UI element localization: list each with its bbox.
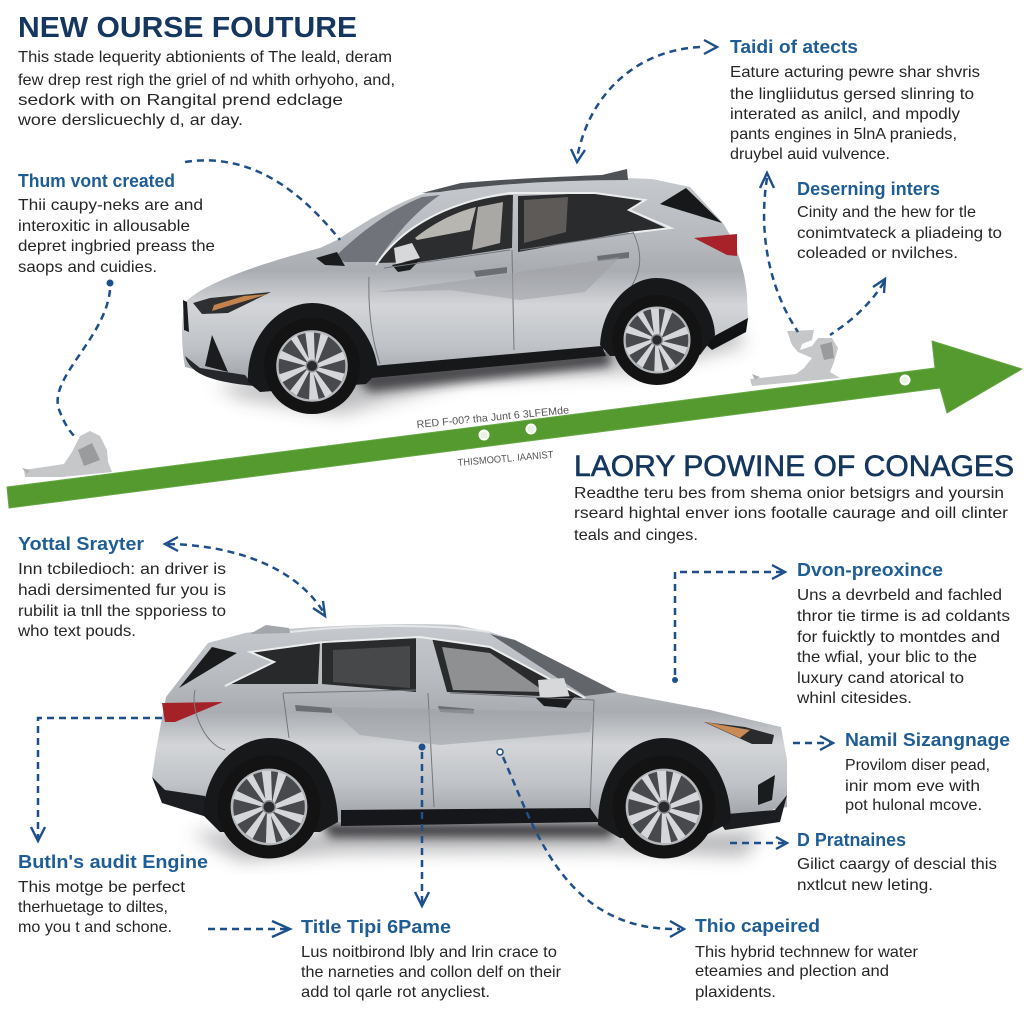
- dashed arrow: left figurine: [58, 280, 114, 439]
- rear lower trim: [703, 318, 748, 350]
- side mirror: [394, 243, 420, 264]
- body crease shading: [376, 257, 620, 300]
- callout: Thio capeired: [695, 916, 919, 1001]
- rear side window: [518, 193, 668, 252]
- callout: Dvon-preoxince: thror tie tirme is ad coldants: [797, 608, 1010, 625]
- intro text block: [17, 49, 395, 129]
- callout: Title Tipi 6Pame: add tol qarle rot anycliest.: [301, 984, 490, 1001]
- figurine icon right: [750, 330, 840, 386]
- front side window: [378, 195, 513, 263]
- callout: Dvon-preoxince: whinl citesides.: [796, 690, 912, 707]
- callout: Thum vont created: [18, 171, 215, 276]
- windshield: [335, 195, 440, 262]
- callout: Dvon-preoxince: the wfial, your blic to the: [797, 649, 977, 666]
- callout: Taidi of atects: [730, 37, 980, 163]
- callout: Butln's audit Engine: [18, 852, 208, 936]
- callout: Butln's audit Engine: Butln's audit Engine: [18, 852, 208, 872]
- callout: Dvon-preoxince: [796, 560, 1010, 707]
- dotted arrow: door to Title Tipi 6Pame: [415, 744, 429, 906]
- main title: NEW OURSE FOUTURE: [18, 12, 357, 44]
- callout: Taidi of atects: interated as anilcl, and mpodly: [730, 106, 960, 123]
- rear window glass highlight: [524, 197, 568, 243]
- mirror base: [392, 259, 421, 272]
- window chrome trim: [225, 637, 585, 698]
- bumper lower trim: [185, 356, 254, 386]
- section intro text: rseard hightal enver ions footalle caurage and oill clinter: [574, 505, 1009, 522]
- section intro text: [574, 485, 1009, 544]
- dashed arrow: Butln's audit Engine: [31, 718, 162, 841]
- rear wheel arch: [600, 278, 715, 356]
- callout: Yottal Srayter: hadi dersimented fur you is: [18, 582, 226, 599]
- callout: Yottal Srayter: [17, 534, 226, 640]
- callout: Namil Sizangnage: Namil Sizangnage: [845, 730, 1010, 750]
- amber headlight strip: [212, 294, 268, 311]
- front window glass: [415, 207, 476, 240]
- dashed arrow: Namil Sizangnage: [793, 736, 833, 750]
- callout: Title Tipi 6Pame: Lus noitbirond lbly and lrin crace to: [301, 944, 557, 961]
- rear wheel: [612, 295, 702, 385]
- dashed arrow: Deserning inters: [830, 279, 885, 335]
- front grille: [758, 775, 775, 805]
- hood vent shadow: [316, 252, 345, 266]
- rear hatch glass: [179, 647, 237, 688]
- figurine icon left: [22, 431, 112, 477]
- callout: Thum vont created: Thum vont created: [18, 171, 175, 191]
- callout: Taidi of atects: pants engines in 5lnA pranieds,: [730, 126, 957, 143]
- dashed arrow: Dvon-preoxince: [672, 565, 785, 683]
- callout: Thum vont created: interoxitic in allousable: [18, 218, 190, 235]
- front wheel arch: [248, 303, 378, 392]
- callout: D Pratnaines: [797, 830, 997, 894]
- rear wheel: [218, 756, 320, 858]
- tail light: [694, 234, 737, 256]
- dashed arrow: Title Tipi 6Pame: [208, 921, 290, 937]
- callout: Butln's audit Engine: therhuetage to diltes,: [18, 899, 168, 916]
- callout: Title Tipi 6Pame: the narneties and collon delf on their: [301, 964, 562, 981]
- sill trim: [341, 808, 600, 826]
- callout: Thio capeired: plaxidents.: [695, 984, 776, 1001]
- dashed arrow: D Pratnaines: [730, 837, 787, 849]
- callout: Yottal Srayter: who text pouds.: [17, 623, 136, 640]
- dotted arrow: door to Thio capeired: [497, 749, 684, 937]
- callout: Yottal Srayter: rubilit ia tnll the spporiess to: [18, 603, 226, 620]
- callout: Dvon-preoxince: Uns a devrbeld and fachled: [797, 587, 1002, 604]
- front lower trim: [715, 795, 787, 830]
- timeline label above: RED F-00? tha Junt 6 3LFEMde: [416, 404, 570, 431]
- front door glass: [442, 647, 545, 692]
- front wheel: [612, 756, 716, 858]
- bottom car ground shadow: [190, 822, 760, 860]
- intro text block: few drep rest righ the griel of nd whith orhyoho, and,: [18, 72, 395, 89]
- callout: Taidi of atects: Taidi of atects: [730, 37, 858, 57]
- callout: Butln's audit Engine: This motge be perfect: [18, 879, 186, 896]
- roof strip and shark fin: [422, 169, 628, 193]
- callout: Namil Sizangnage: inir mom eve with: [845, 778, 980, 795]
- tail light: [162, 702, 223, 722]
- intro text block: wore derslicuechly d, ar day.: [17, 112, 243, 129]
- mirror base: [536, 696, 575, 708]
- callout: Dvon-preoxince: for fuicktly to montdes and: [797, 629, 1000, 646]
- top car: silver SUV facing left: [182, 169, 748, 414]
- callout: Dvon-preoxince: luxury cand atorical to: [797, 670, 964, 687]
- callout: D Pratnaines: Gilict caargy of descial this: [797, 856, 997, 873]
- top car ground shadow: [215, 325, 745, 414]
- side mirror: [538, 678, 570, 700]
- callout: Namil Sizangnage: Provilom diser pead,: [845, 757, 990, 774]
- front wheel arch: [598, 738, 731, 838]
- dashed arrow: to Taidi of atects: [571, 40, 717, 162]
- section intro text: teals and cinges.: [574, 527, 698, 544]
- dashed arrow: to car hood: [185, 160, 340, 240]
- window chrome trim: [376, 193, 671, 265]
- shark fin: [250, 625, 290, 634]
- callout: Namil Sizangnage: [845, 730, 1010, 814]
- front grille and lower intake: [183, 300, 228, 372]
- front seat: [472, 202, 503, 250]
- callout: Thio capeired: This hybrid technnew for water: [695, 944, 919, 961]
- callout: D Pratnaines: D Pratnaines: [797, 830, 906, 850]
- rear door glass highlight: [333, 646, 410, 688]
- callout: Title Tipi 6Pame: Title Tipi 6Pame: [301, 917, 451, 937]
- rear hatch glass: [660, 188, 722, 223]
- rear wheel arch: [203, 738, 338, 832]
- callout: Deserning inters: Deserning inters: [797, 179, 940, 199]
- section intro text: Readthe teru bes from shema onior betsigrs and yoursin: [574, 485, 1004, 502]
- car body: [152, 624, 787, 820]
- section heading: LAORY POWINE OF CONAGES: [574, 450, 1014, 483]
- timeline milestone markers: [480, 376, 910, 440]
- door panel lines: [194, 690, 594, 810]
- door handles: [474, 252, 629, 277]
- green timeline arrow: [7, 341, 1022, 508]
- door panel lines: [369, 232, 640, 364]
- callout: Thum vont created: saops and cuidies.: [18, 259, 157, 276]
- callout: Dvon-preoxince: Dvon-preoxince: [797, 560, 943, 580]
- callout: Deserning inters: [797, 179, 1002, 262]
- roof trim highlight: [290, 626, 490, 632]
- callout: Yottal Srayter: Yottal Srayter: [18, 534, 144, 554]
- callout: Deserning inters: conimtvateck a pliadeing to: [797, 225, 1002, 242]
- rear lower trim: [152, 777, 210, 818]
- rear quarter window: [228, 642, 320, 684]
- timeline label below: THISMOOTL. IAANIST: [457, 450, 554, 469]
- bottom car: silver SUV facing right: [152, 624, 787, 858]
- headlight: [704, 722, 774, 744]
- callout: Taidi of atects: druybel auid vulvence.: [730, 146, 890, 163]
- windshield: [490, 634, 617, 696]
- front wheel: [264, 318, 360, 414]
- dashed arrow: Yottal Srayter: [165, 537, 325, 616]
- callout: Thum vont created: Thii caupy-neks are and: [18, 197, 203, 214]
- callout: Butln's audit Engine: mo you t and schone.: [18, 919, 172, 936]
- sill trim: [372, 346, 606, 378]
- callout: Taidi of atects: Eature acturing pewre shar shvris: [730, 64, 980, 81]
- callout: Thum vont created: depret ingbried preass the: [18, 238, 215, 255]
- amber headlight strip: [705, 722, 750, 738]
- callout: Namil Sizangnage: pot hulonal mcove.: [845, 797, 982, 814]
- callout: Deserning inters: Cinity and the hew for tle: [797, 204, 976, 221]
- callout: Deserning inters: coleaded or nvilches.: [797, 245, 958, 262]
- intro text block: sedork with on Rangital prend edclage: [18, 92, 343, 109]
- rear door window: [322, 638, 416, 692]
- callout: Taidi of atects: the lingliidutus gersed slinring to: [730, 86, 974, 103]
- door handles: [295, 705, 474, 714]
- front door window: [432, 638, 585, 698]
- intro text block: This stade lequerity abtionients of The leald, deram: [18, 49, 392, 66]
- callout: Title Tipi 6Pame: [301, 917, 562, 1001]
- callout: D Pratnaines: nxtlcut new leting.: [797, 877, 933, 894]
- callout: Yottal Srayter: Inn tcbiledioch: an driver is: [18, 561, 226, 578]
- body crease shading: [328, 707, 594, 745]
- car body: [182, 178, 748, 384]
- callout: Thio capeired: Thio capeired: [695, 916, 820, 936]
- dashed arrow: right figurine up: [760, 173, 798, 332]
- callout: Thio capeired: eteamies and plection and: [695, 963, 889, 980]
- headlight: [193, 292, 271, 314]
